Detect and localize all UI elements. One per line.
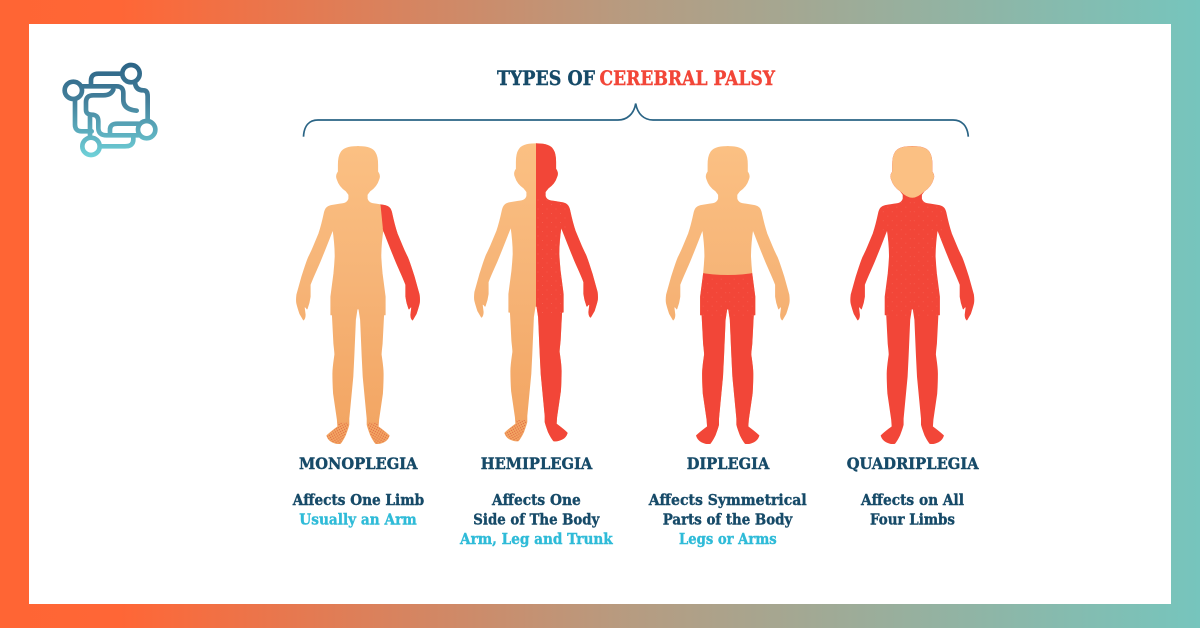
label: diplegia: Parts of the Body	[663, 511, 793, 529]
figure: quadriplegia	[851, 147, 974, 443]
label: diplegia: Affects Symmetrical	[648, 491, 807, 509]
label: hemiplegia: HEMIPLEGIA	[481, 454, 593, 473]
figure: monoplegia	[297, 147, 419, 443]
logo: connected circuit nodes	[65, 65, 155, 155]
label: hemiplegia: Arm, Leg and Trunk	[459, 530, 613, 548]
label: monoplegia	[292, 454, 424, 529]
label: diplegia	[648, 454, 807, 548]
label: quadriplegia: Affects on All	[860, 491, 964, 509]
curly brace	[304, 104, 968, 137]
title: CEREBRAL PALSY	[600, 66, 776, 90]
label: hemiplegia: Affects One	[491, 491, 581, 509]
label: quadriplegia: Four Limbs	[870, 511, 955, 529]
figure: hemiplegia	[475, 144, 597, 441]
label: diplegia: Legs or Arms	[679, 530, 777, 548]
label: monoplegia: MONOPLEGIA	[299, 454, 418, 473]
label: quadriplegia: QUADRIPLEGIA	[847, 454, 979, 473]
figure: diplegia	[666, 147, 789, 443]
label: hemiplegia	[459, 454, 613, 548]
label: diplegia: DIPLEGIA	[687, 454, 770, 473]
label: hemiplegia: Side of The Body	[473, 511, 600, 529]
title: TYPES OF	[497, 66, 595, 90]
label: monoplegia: Usually an Arm	[299, 511, 417, 529]
label: quadriplegia	[847, 454, 979, 529]
title	[497, 66, 776, 90]
label: monoplegia: Affects One Limb	[292, 491, 424, 509]
